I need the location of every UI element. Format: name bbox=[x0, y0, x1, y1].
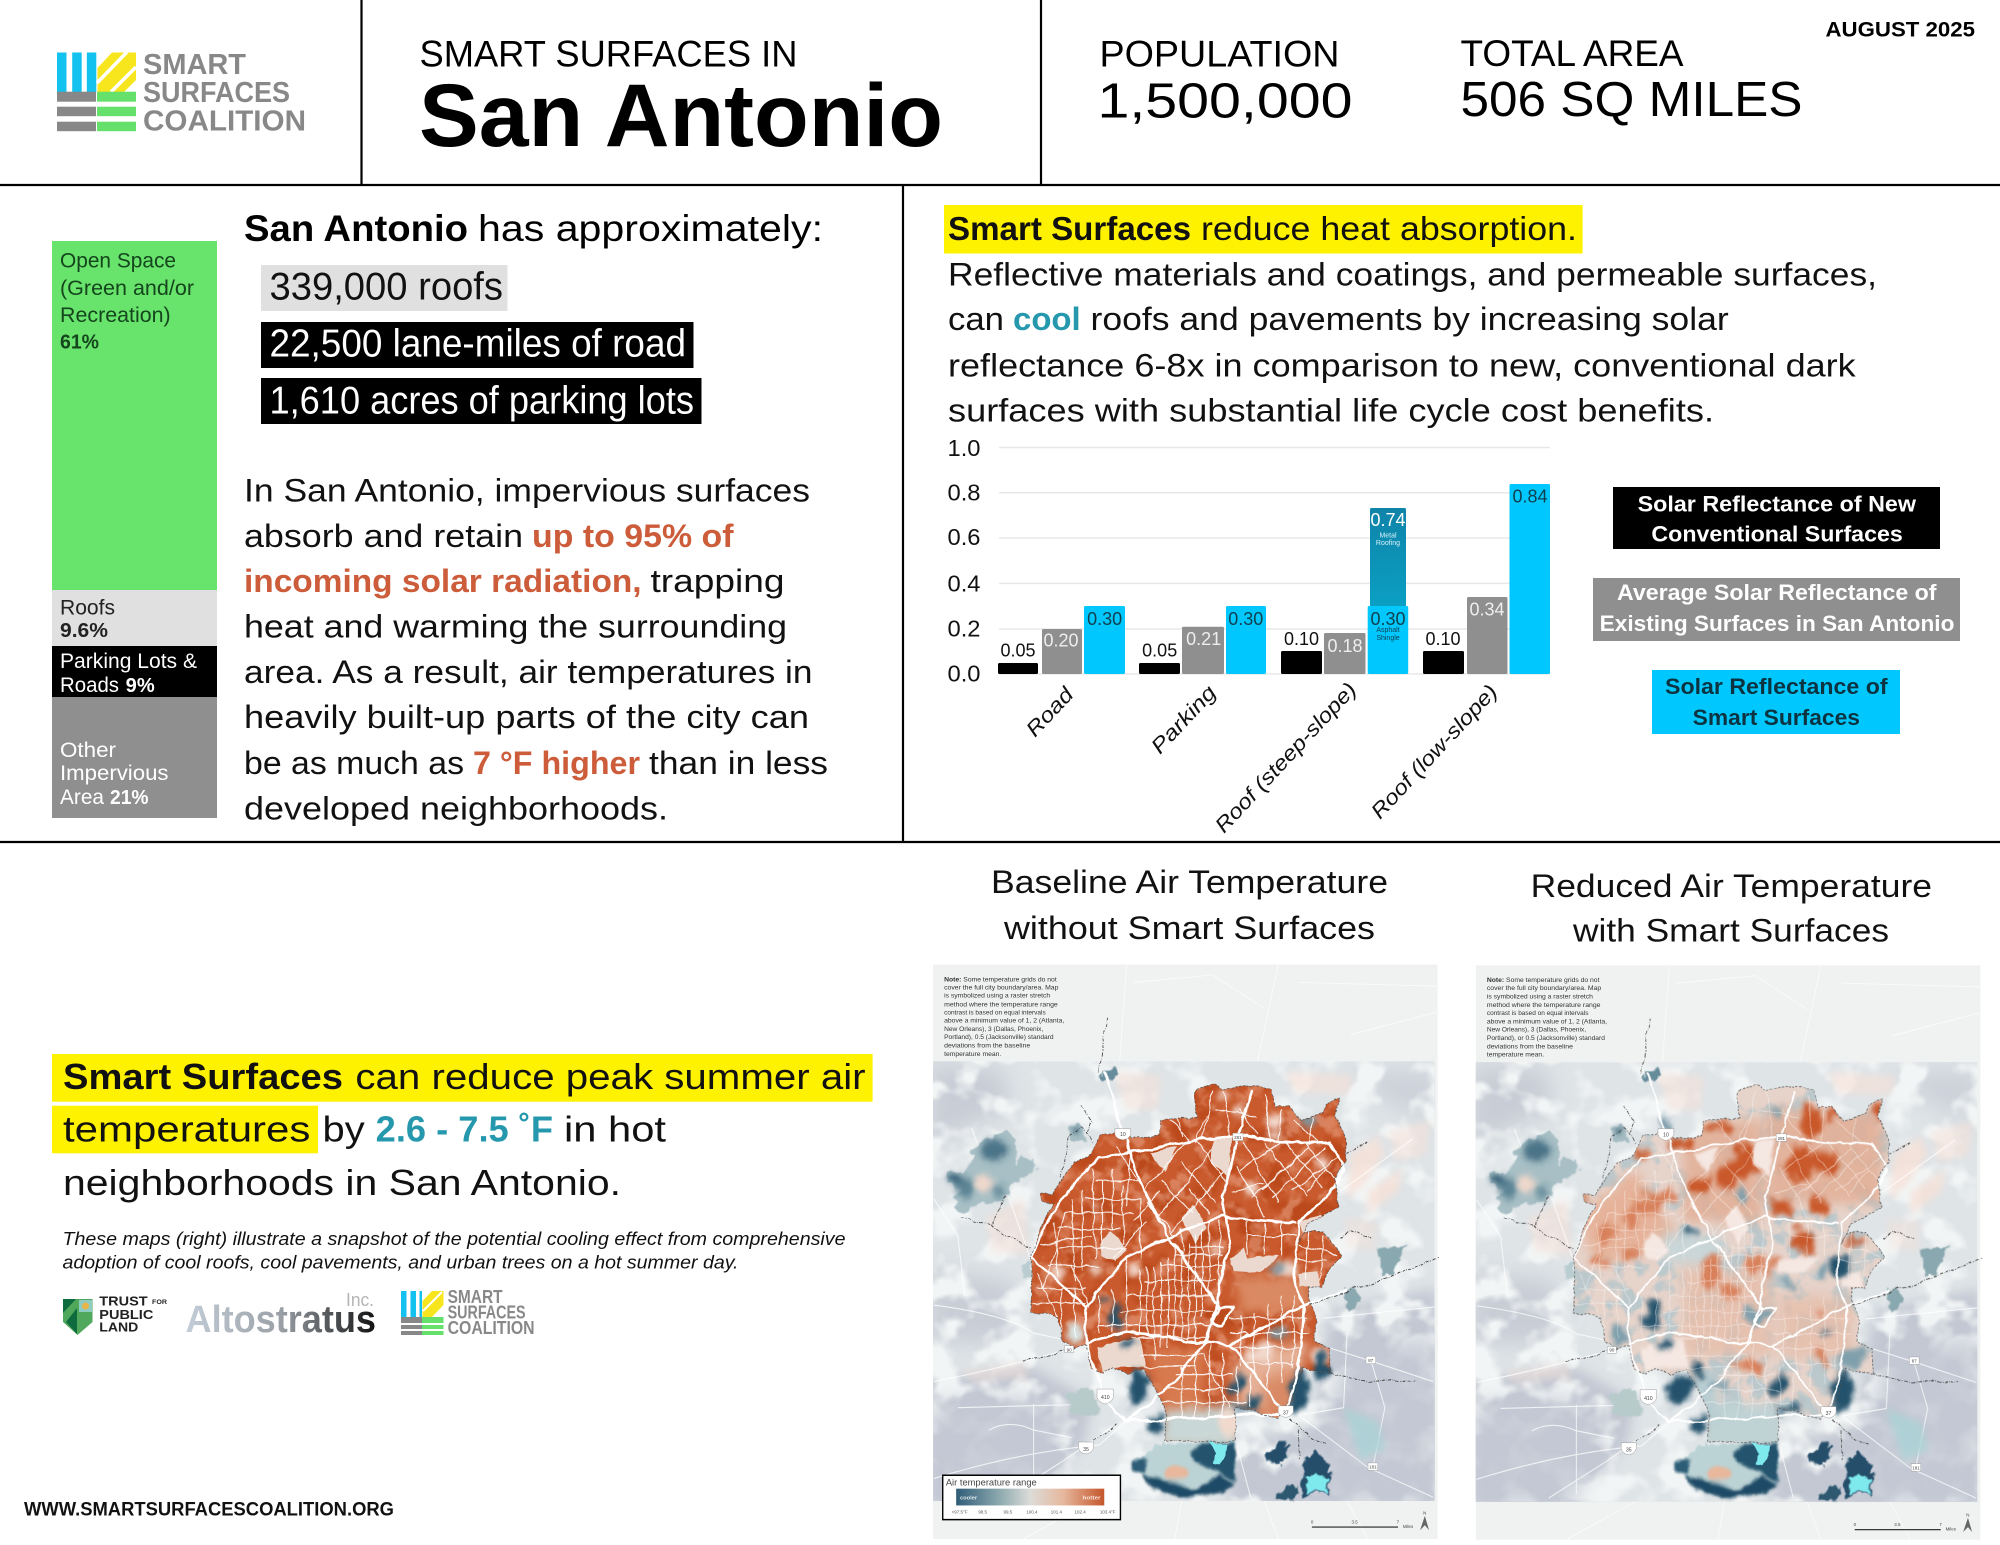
y axis labels: 0.8 bbox=[948, 480, 980, 506]
heading: San Antonio has approximately bbox=[244, 208, 823, 249]
bar values: 0.34 bbox=[1469, 600, 1505, 620]
logo: Smart Surfaces Coalition: SURFACES bbox=[143, 77, 290, 109]
logo: Altostratus: Altostratus bbox=[186, 1299, 376, 1341]
scale bar and north arrow: N bbox=[1423, 1510, 1426, 1515]
header rules bbox=[0, 0, 2000, 842]
note: cover the full city boundary/area. Map bbox=[1487, 985, 1602, 992]
legend: air temperature range: 101.4 bbox=[1051, 1509, 1062, 1514]
x axis labels: Roof (steep-slope) bbox=[1211, 678, 1361, 837]
logo: Smart Surfaces Coalition: SMART bbox=[143, 49, 246, 81]
map title: baseline: Baseline Air Temperature bbox=[991, 864, 1388, 900]
title: SMART SURFACES IN bbox=[420, 34, 798, 75]
city heat, cool spots and streets bbox=[1489, 1019, 1981, 1501]
paragraph: impervious surfaces: 7 °F higher bbox=[473, 745, 640, 781]
paragraph: reflective materials: roofs and pavements by increasing solar bbox=[1090, 301, 1729, 337]
x axis labels: Roof (low-slope) bbox=[1367, 680, 1502, 823]
y axis labels: 0.4 bbox=[948, 571, 981, 597]
scale bar and north arrow: Miles bbox=[1403, 1524, 1414, 1529]
land cover stacked bar: 9% bbox=[126, 675, 155, 697]
caption: map explanation bbox=[62, 1229, 846, 1272]
callout: peak temperature reduction: can reduce peak summer air bbox=[355, 1056, 866, 1097]
note: above a minimum value of 1, 2 (Atlanta, bbox=[1487, 1018, 1607, 1026]
bar annotations: Roofing bbox=[1376, 540, 1400, 547]
paragraph: impervious surfaces: developed neighborhoods. bbox=[244, 790, 668, 826]
bar values: 0.74 bbox=[1370, 510, 1406, 530]
note: New Orleans), 3 (Dallas, Phoenix, bbox=[1487, 1026, 1586, 1034]
map title: baseline: without Smart Surfaces bbox=[1003, 910, 1375, 946]
bar annotations: Metal bbox=[1379, 533, 1397, 540]
legend: air temperature range: Air temperature range bbox=[946, 1477, 1037, 1487]
legend: air temperature range: hotter bbox=[1083, 1495, 1101, 1502]
legend: air temperature range: 98.5 bbox=[978, 1509, 987, 1514]
legend: existing surfaces bbox=[1593, 578, 1960, 641]
logo: Smart Surfaces Coalition small bbox=[401, 1287, 535, 1338]
paragraph: impervious surfaces: In San Antonio, impervious surfaces bbox=[244, 472, 810, 508]
highlighted heading: reduce heat absorption: reduce heat absorption. bbox=[1201, 210, 1577, 247]
map title: reduced: with Smart Surfaces bbox=[1572, 912, 1889, 948]
bar values: 0.20 bbox=[1043, 631, 1079, 651]
city heat, cool spots and streets bbox=[946, 1018, 1438, 1500]
highway shields: 410 bbox=[1101, 1395, 1110, 1401]
legend: smart surfaces: Solar Reflectance of bbox=[1665, 674, 1888, 699]
legend: new conventional: Conventional Surfaces bbox=[1651, 522, 1903, 547]
highway shields: 87 bbox=[1368, 1358, 1374, 1363]
paragraph: impervious surfaces: incoming solar radiation, bbox=[244, 563, 642, 599]
paragraph: reflective materials: surfaces with substantial life cycle cost benefits. bbox=[948, 393, 1714, 429]
highlighted heading: reduce heat absorption: Smart Surfaces bbox=[948, 210, 1191, 247]
bar values: 0.30 bbox=[1087, 609, 1122, 629]
callout: peak temperature reduction: temperatures bbox=[63, 1109, 310, 1150]
date: AUGUST 2025 bbox=[1826, 19, 1975, 42]
note: cover the full city boundary/area. Map bbox=[944, 984, 1059, 992]
heading: San Antonio has approximately: has approximately: bbox=[478, 208, 823, 249]
logo: Smart Surfaces Coalition: COALITION bbox=[143, 106, 306, 138]
note bbox=[1487, 977, 1607, 1059]
note: is symbolized using a raster stretch bbox=[944, 992, 1050, 1000]
map title: baseline bbox=[991, 864, 1388, 946]
streets bbox=[961, 1018, 1438, 1460]
legend: air temperature range: 99.5 bbox=[1003, 1509, 1013, 1514]
note: contrast is based on equal intervals bbox=[1487, 1010, 1588, 1017]
bar values: 0.18 bbox=[1327, 636, 1363, 656]
land cover stacked bar: Roads bbox=[60, 674, 119, 697]
bar values bbox=[1000, 487, 1548, 661]
land cover stacked bar: Area bbox=[60, 786, 104, 809]
bar values: 0.84 bbox=[1512, 487, 1548, 507]
logo: Trust for Public Land: PUBLIC bbox=[99, 1307, 154, 1322]
x axis labels bbox=[1022, 678, 1502, 837]
highway shields: 10 bbox=[1663, 1132, 1669, 1139]
highway shields: 87 bbox=[1912, 1358, 1917, 1364]
bar values: 0.21 bbox=[1186, 629, 1221, 649]
land cover stacked bar: Other bbox=[60, 739, 116, 762]
logo: Trust for Public Land: LAND bbox=[99, 1320, 138, 1334]
callout: peak temperature reduction: by bbox=[322, 1109, 365, 1150]
scale bar and north arrow: 0 bbox=[1854, 1522, 1857, 1527]
note: temperature mean. bbox=[1487, 1051, 1544, 1059]
legend: air temperature range: cooler bbox=[960, 1495, 977, 1502]
highway shields: 281 bbox=[1234, 1135, 1242, 1140]
logo: Smart Surfaces Coalition small: SMART bbox=[448, 1287, 503, 1307]
logo: Trust for Public Land: TRUST bbox=[99, 1294, 148, 1308]
heading: San Antonio has approximately: San Antonio bbox=[244, 208, 468, 249]
stat pills: 1,610 acres of parking lots bbox=[270, 380, 694, 422]
note: temperature mean. bbox=[944, 1051, 1002, 1058]
note: deviations from the baseline bbox=[944, 1042, 1031, 1050]
scale bar and north arrow: 7 bbox=[1397, 1519, 1400, 1524]
legend: new conventional: Solar Reflectance of New bbox=[1638, 492, 1917, 517]
bar chart: solar reflectance bbox=[948, 435, 1550, 837]
land cover stacked bar: (Green and/or bbox=[60, 277, 194, 300]
callout: peak temperature reduction: 2.6 - 7.5 ˚F bbox=[376, 1109, 553, 1150]
paragraph: impervious surfaces: absorb and retain bbox=[244, 518, 523, 554]
stat pills: 22,500 lane-miles of road bbox=[270, 322, 686, 366]
paragraph: reflective materials: reflectance 6-8x in comparison to new, conventional dark bbox=[948, 348, 1857, 384]
highway shields: 181 bbox=[1369, 1464, 1377, 1470]
land cover stacked bar bbox=[52, 241, 217, 818]
bar annotations: Asphalt bbox=[1376, 627, 1400, 634]
note: method where the temperature range bbox=[944, 1001, 1058, 1008]
y axis labels: 1.0 bbox=[948, 435, 980, 461]
bar values: 0.30 bbox=[1370, 609, 1406, 629]
note: is symbolized using a raster stretch bbox=[1487, 993, 1593, 1001]
legend: new conventional bbox=[1613, 487, 1940, 549]
land cover stacked bar: 61% bbox=[60, 332, 99, 354]
highway shields: 10 bbox=[1120, 1132, 1126, 1138]
logo: Smart Surfaces Coalition bbox=[57, 49, 306, 138]
callout: peak temperature reduction: neighborhoods in San Antonio. bbox=[63, 1162, 621, 1203]
bar values: 0.05 bbox=[1142, 641, 1177, 661]
land cover stacked bar: Roofs bbox=[60, 597, 115, 620]
paragraph: impervious surfaces: be as much as bbox=[244, 745, 464, 781]
note: Note: Some temperature grids do not bbox=[1487, 977, 1600, 984]
highway shields: 281 bbox=[1778, 1136, 1785, 1141]
title: San Antonio bbox=[419, 65, 943, 165]
logo: Trust for Public Land bbox=[63, 1294, 168, 1335]
paragraph: reflective materials: Reflective materials and coatings, and permeable surfaces, bbox=[948, 256, 1877, 292]
land cover stacked bar: Impervious bbox=[60, 762, 168, 785]
cool spots bbox=[1489, 1069, 1948, 1501]
highway shields bbox=[1065, 1129, 1378, 1470]
land cover stacked bar: 9.6% bbox=[60, 620, 108, 642]
highlighted heading: reduce heat absorption bbox=[944, 205, 1583, 254]
legend: existing surfaces: Average Solar Reflectance of bbox=[1617, 580, 1937, 605]
highway shields bbox=[1607, 1129, 1921, 1471]
legend: air temperature range: 102.4 bbox=[1075, 1509, 1086, 1514]
legend: smart surfaces bbox=[1652, 670, 1900, 734]
highway shields: 37 bbox=[1826, 1411, 1831, 1417]
note: method where the temperature range bbox=[1487, 1002, 1601, 1009]
note: Note: Some temperature grids do not bbox=[944, 976, 1057, 983]
highway shields: 410 bbox=[1644, 1396, 1653, 1402]
y axis labels: 0.0 bbox=[948, 661, 980, 687]
paragraph: impervious surfaces: trapping bbox=[650, 563, 784, 599]
legend: air temperature range bbox=[943, 1475, 1120, 1520]
paragraph: reflective materials bbox=[948, 256, 1877, 429]
highway shields: 90 bbox=[1067, 1347, 1072, 1352]
legend: air temperature range: <97.5°F bbox=[952, 1509, 968, 1514]
paragraph: impervious surfaces: heat and warming the surrounding bbox=[244, 608, 787, 644]
streets bbox=[1504, 1019, 1981, 1461]
paragraph: reflective materials: can bbox=[948, 301, 1004, 337]
reduced heat surface bbox=[1566, 1071, 1897, 1449]
map title: reduced bbox=[1531, 868, 1932, 948]
stat: population: POPULATION bbox=[1100, 34, 1340, 75]
website: WWW.SMARTSURFACESCOALITION.ORG bbox=[24, 1500, 394, 1520]
bar values: 0.10 bbox=[1284, 629, 1319, 649]
pale holes bbox=[1097, 1137, 1321, 1374]
bar values: 0.30 bbox=[1228, 609, 1263, 629]
map title: reduced: Reduced Air Temperature bbox=[1531, 868, 1932, 904]
scale bar and north arrow: 3.5 bbox=[1352, 1519, 1358, 1524]
paragraph: reflective materials: cool bbox=[1013, 301, 1081, 337]
stat: total area: 506 SQ MILES bbox=[1460, 73, 1802, 127]
scale bar and north arrow: 3.5 bbox=[1894, 1522, 1901, 1527]
stat: total area bbox=[1460, 33, 1802, 127]
scale bar and north arrow: 7 bbox=[1939, 1522, 1942, 1527]
x axis labels: Road bbox=[1022, 682, 1079, 741]
paragraph: impervious surfaces: than in less bbox=[649, 745, 828, 781]
caption: map explanation: These maps (right) illustrate a snapshot of the potential cooling effect from comprehensive bbox=[62, 1229, 846, 1249]
logo: Altostratus: Inc. bbox=[346, 1290, 374, 1310]
bar annotations: Shingle bbox=[1376, 635, 1400, 642]
scale bar and north arrow: Miles bbox=[1946, 1526, 1957, 1531]
logo: Smart Surfaces Coalition small: COALITION bbox=[448, 1318, 535, 1338]
note: above a minimum value of 1, 2 (Atlanta, bbox=[944, 1017, 1065, 1025]
callout: peak temperature reduction: in hot bbox=[564, 1109, 666, 1150]
bars bbox=[998, 484, 1550, 674]
scale bar and north arrow bbox=[1854, 1512, 1972, 1532]
y axis labels: 0.2 bbox=[948, 616, 980, 642]
map: reduced air temperature bbox=[1000, 966, 1983, 1540]
land cover stacked bar: Recreation) bbox=[60, 304, 171, 327]
highway shields: 35 bbox=[1626, 1448, 1632, 1454]
cool spots bbox=[946, 1068, 1406, 1500]
logo: Smart Surfaces Coalition small: SURFACES bbox=[448, 1302, 526, 1322]
note bbox=[944, 976, 1065, 1058]
legend: air temperature range: 100.4 bbox=[1026, 1509, 1038, 1514]
callout: peak temperature reduction bbox=[52, 1054, 873, 1203]
land cover stacked bar: Parking Lots & bbox=[60, 650, 197, 673]
note: contrast is based on equal intervals bbox=[944, 1009, 1046, 1017]
callout: peak temperature reduction: Smart Surfaces bbox=[63, 1056, 343, 1097]
stat: total area: TOTAL AREA bbox=[1460, 33, 1684, 74]
paragraph: impervious surfaces: area. As a result, air temperatures in bbox=[244, 654, 812, 690]
highway shields: 37 bbox=[1283, 1410, 1289, 1416]
paragraph: impervious surfaces: heavily built-up parts of the city can bbox=[244, 699, 809, 735]
stat pills: 339,000 roofs bbox=[270, 266, 503, 308]
scale bar and north arrow: N bbox=[1966, 1512, 1969, 1517]
legend: existing surfaces: Existing Surfaces in San Antonio bbox=[1600, 611, 1954, 636]
highway shields: 181 bbox=[1912, 1465, 1920, 1470]
stat pills bbox=[261, 265, 702, 424]
legend: smart surfaces: Smart Surfaces bbox=[1693, 705, 1860, 730]
paragraph: impervious surfaces: up to 95% of bbox=[532, 518, 734, 554]
bar values: 0.05 bbox=[1000, 641, 1036, 661]
land cover stacked bar: Open Space bbox=[60, 250, 176, 272]
y axis labels bbox=[948, 435, 981, 687]
scale bar and north arrow: 0 bbox=[1311, 1519, 1314, 1524]
paragraph: impervious surfaces bbox=[244, 472, 828, 826]
map: baseline air temperature bbox=[933, 964, 1440, 1539]
note: Portland), or 0.5 (Jacksonville) standard bbox=[1487, 1035, 1605, 1042]
heat surface bbox=[1023, 1079, 1354, 1449]
highway shields: 35 bbox=[1083, 1447, 1089, 1453]
note: deviations from the baseline bbox=[1487, 1043, 1574, 1050]
stat: population: 1,500,000 bbox=[1098, 74, 1352, 128]
bar values: 0.10 bbox=[1425, 629, 1461, 649]
note: New Orleans), 3 (Dallas, Phoenix, bbox=[944, 1026, 1044, 1033]
y axis labels: 0.6 bbox=[948, 524, 980, 550]
scale bar and north arrow bbox=[1311, 1510, 1429, 1530]
highway shields: 90 bbox=[1609, 1348, 1615, 1353]
legend: air temperature range: 103.4°F bbox=[1100, 1509, 1116, 1514]
x axis labels: Parking bbox=[1147, 681, 1221, 758]
stat: population bbox=[1098, 34, 1352, 128]
note: Portland), 0.5 (Jacksonville) standard bbox=[944, 1034, 1054, 1041]
bar annotations bbox=[1376, 533, 1400, 642]
land cover stacked bar: 21% bbox=[110, 787, 149, 809]
logo: Trust for Public Land: FOR bbox=[152, 1300, 168, 1306]
caption: map explanation: adoption of cool roofs, cool pavements, and urban trees on a hot summer day. bbox=[62, 1252, 738, 1272]
